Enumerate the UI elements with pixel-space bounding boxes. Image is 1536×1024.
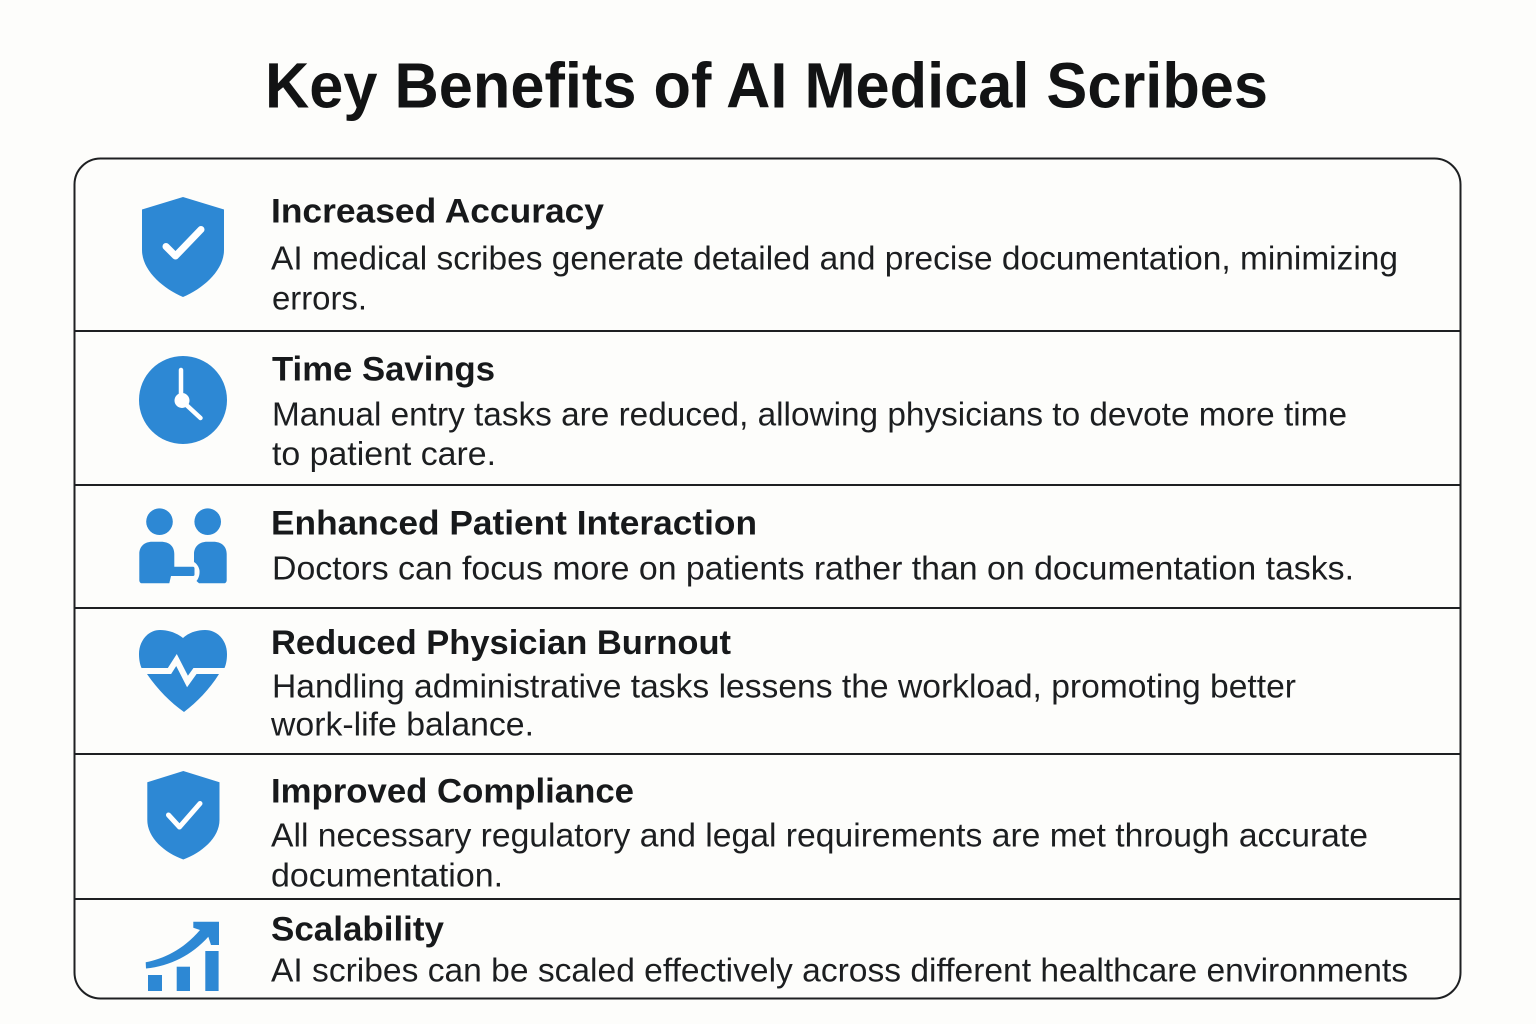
- text: reduced physician burnout description: [270, 668, 1296, 742]
- text: time savings description: to patient care.: [272, 435, 496, 472]
- text: scalability description: AI scribes can be scaled effectively across different healthcare environments: [271, 952, 1408, 989]
- text: enhanced patient interaction description: Doctors can focus more on patients rather than on documentation tasks.: [272, 550, 1354, 586]
- text: time savings description: [272, 396, 1347, 472]
- row: time savings: [139, 350, 1347, 472]
- text: increased accuracy description: AI medical scribes generate detailed and precise documentation, minimizing: [271, 240, 1398, 276]
- text: improved compliance description: documentation.: [271, 856, 503, 894]
- row: reduced physician burnout: [136, 624, 1296, 742]
- icon: growth chart with arrow: [146, 922, 219, 991]
- text: increased accuracy description: [271, 240, 1398, 316]
- heading: reduced physician burnout: Reduced Physician Burnout: [271, 624, 732, 662]
- heading: enhanced patient interaction: Enhanced Patient Interaction: [271, 504, 757, 542]
- text: increased accuracy description: errors.: [272, 280, 367, 316]
- heading: scalability: Scalability: [271, 910, 444, 948]
- text: time savings description: Manual entry tasks are reduced, allowing physicians to devote more time: [272, 396, 1347, 432]
- heading: improved compliance: Improved Compliance: [271, 772, 634, 810]
- row: increased accuracy: [142, 192, 1398, 316]
- panel: benefits table: [74, 158, 1460, 998]
- text: reduced physician burnout description: work-life balance.: [270, 706, 534, 742]
- icon: shield with check: [142, 197, 224, 297]
- icon: compliance shield with check: [147, 771, 220, 860]
- heading: increased accuracy: Increased Accuracy: [271, 192, 604, 230]
- heading: time savings: Time Savings: [272, 350, 495, 388]
- row: scalability: [146, 910, 1408, 991]
- icon: heart with pulse: [136, 630, 231, 712]
- text: improved compliance description: All necessary regulatory and legal requirements are met through accurate: [271, 816, 1368, 854]
- title: Key Benefits of AI Medical Scribes: [265, 50, 1268, 122]
- row: enhanced patient interaction: [139, 504, 1354, 586]
- icon: clock: [139, 356, 227, 444]
- icon: two people shaking hands: [139, 508, 227, 583]
- row: improved compliance: [147, 771, 1368, 894]
- text: reduced physician burnout description: Handling administrative tasks lessens the workload, promoting better: [272, 668, 1296, 704]
- text: improved compliance description: [271, 816, 1368, 894]
